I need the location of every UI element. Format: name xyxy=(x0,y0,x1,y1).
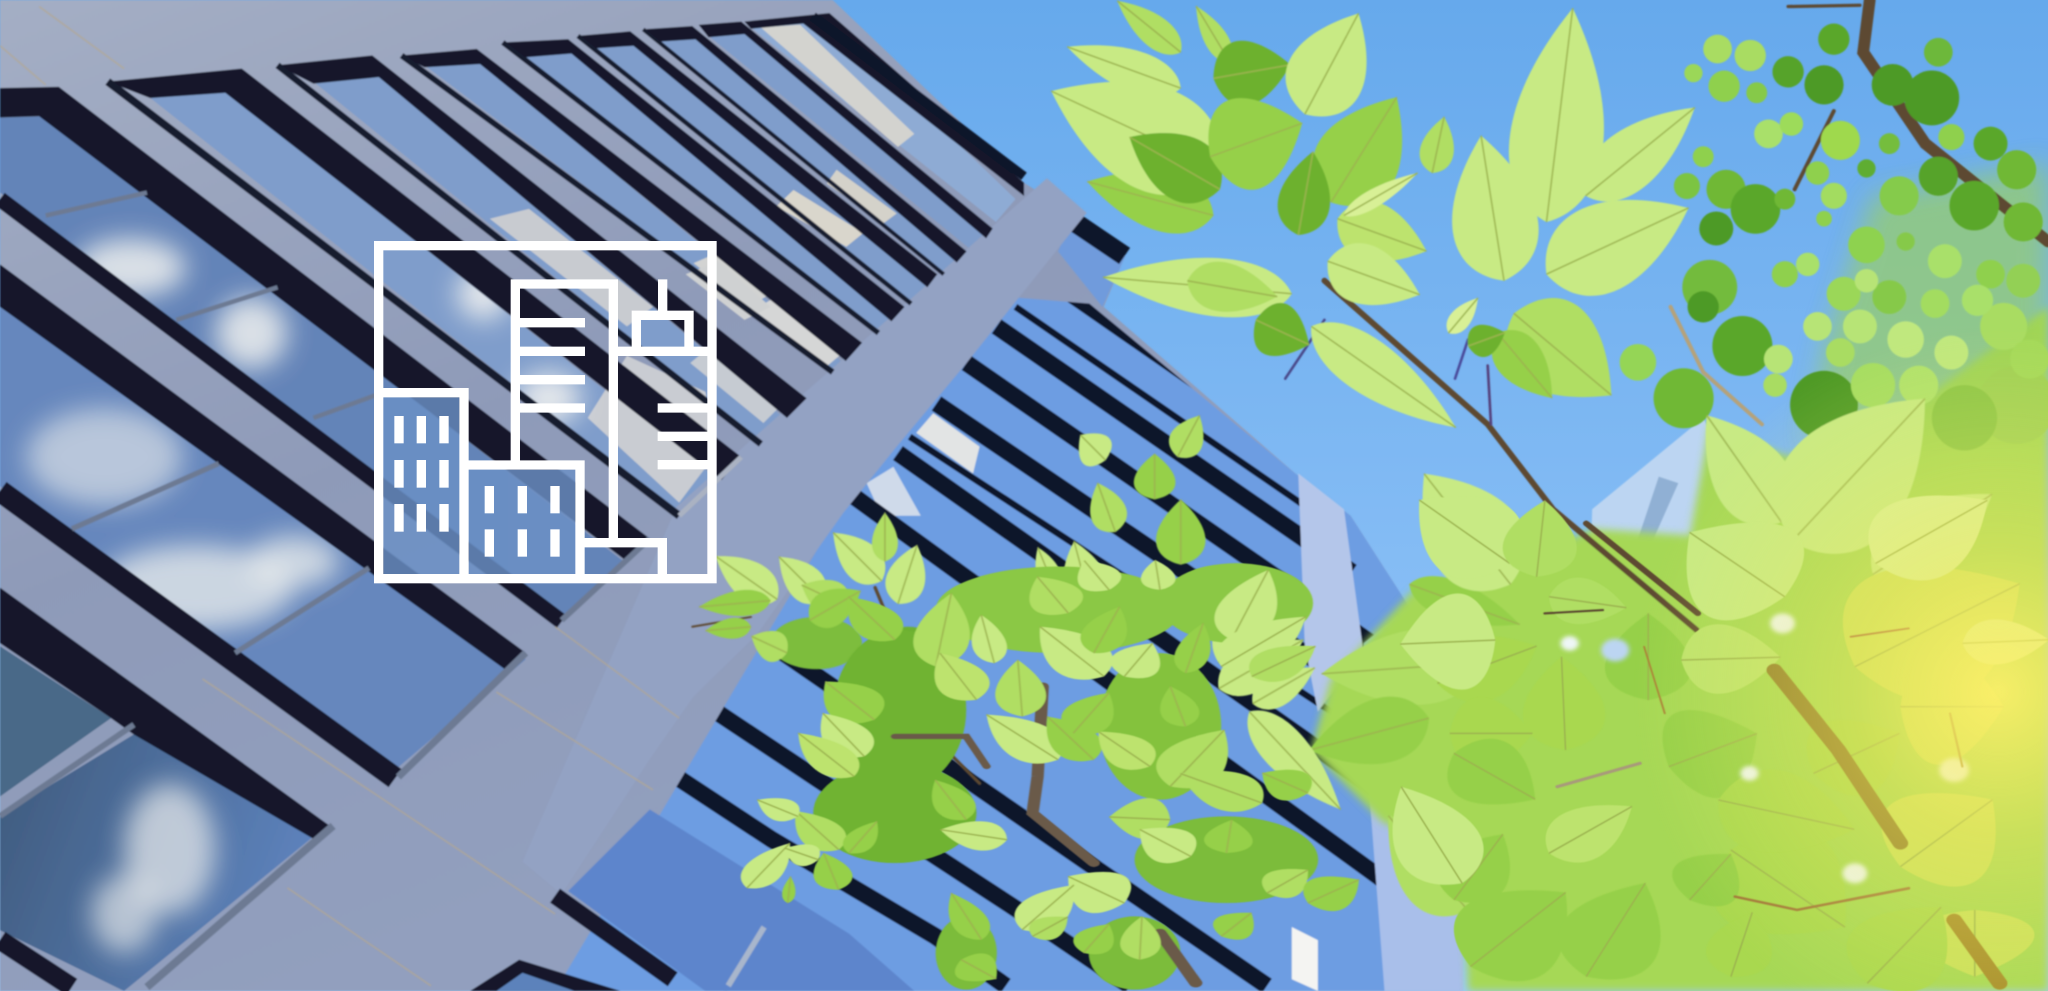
left tree leaves (right half) xyxy=(1163,408,1214,465)
upper window panes xyxy=(150,91,718,516)
corner strip xyxy=(522,178,1087,894)
icon: frame and building outlines xyxy=(379,246,712,579)
green mass lower right xyxy=(1311,307,2048,991)
window frames xyxy=(0,193,764,987)
sky and building specks through leaves xyxy=(1561,613,1969,883)
big leaves top left cluster xyxy=(1107,0,1191,64)
big leaves centre xyxy=(1500,2,1619,228)
icon: building windows xyxy=(394,416,560,557)
lower window glass xyxy=(0,116,624,617)
branches xyxy=(1545,523,2000,983)
light column xyxy=(1298,473,1364,712)
lower edge of upper rows xyxy=(108,29,944,516)
tree foliage: sunlit lower right xyxy=(1363,466,2048,991)
distant building xyxy=(1587,418,1750,718)
icon: blue tinted building fills xyxy=(383,397,575,574)
top wing piece xyxy=(1058,222,1125,307)
lower right window xyxy=(568,810,914,991)
tree foliage: right half xyxy=(1025,0,2048,991)
large window dark bands xyxy=(0,199,562,621)
mid leaves over sky xyxy=(1319,625,1484,711)
facade seams xyxy=(0,7,679,986)
right wing glass and louvres xyxy=(565,297,1406,991)
tree foliage: left half xyxy=(692,512,980,783)
clouds reflected in glass xyxy=(26,238,692,953)
small leaves upper right xyxy=(1620,24,2048,450)
pale reflected panes xyxy=(761,25,914,147)
upper row dark bands xyxy=(0,87,650,561)
tree foliage: centre lower branch xyxy=(731,554,1375,991)
upper branches xyxy=(1285,0,2048,630)
building facade xyxy=(0,0,1469,991)
